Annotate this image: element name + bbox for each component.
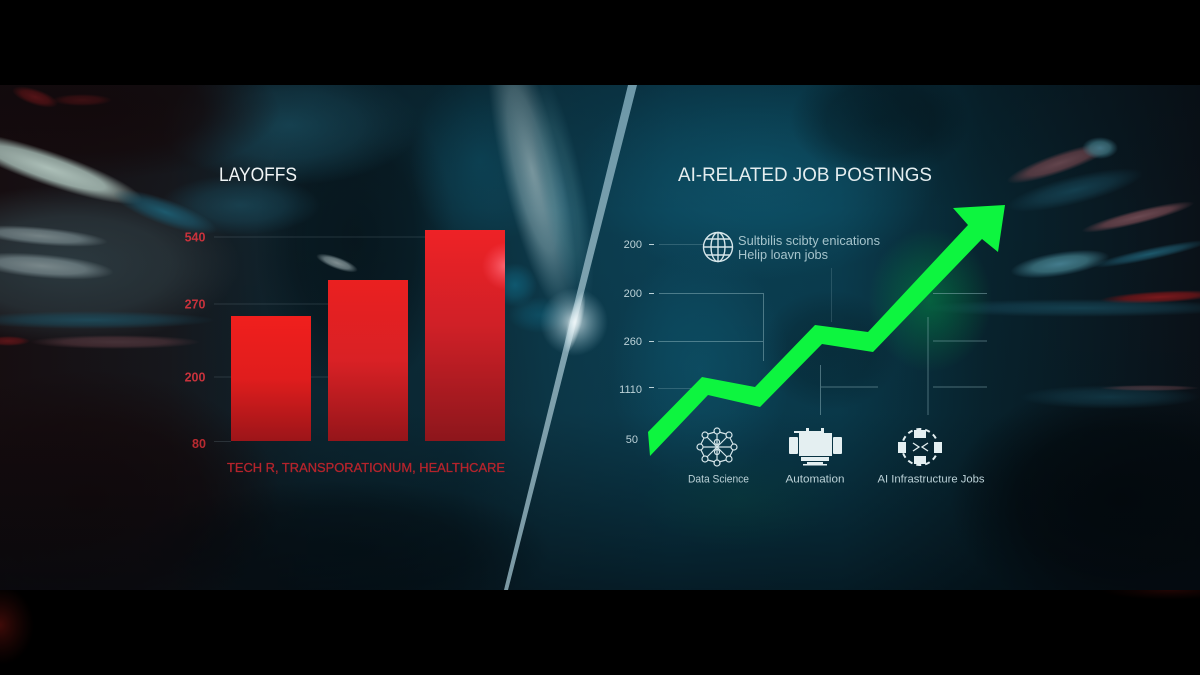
centre light beam [491,85,588,328]
icon: automation machines [789,428,842,466]
bar: healthcare [425,230,505,441]
bar: tech [231,316,311,441]
heading: layoffs: LAYOFFS [219,165,297,186]
axis ticks [649,244,654,388]
icon: AI infrastructure ring [898,429,942,465]
icon labels: Automation [786,474,844,486]
layoffs gridlines [214,237,425,442]
icon labels: AI Infrastructure Jobs [878,474,985,486]
panel: AI-related job postings chart [619,165,1005,486]
postings y axis labels: 200 [624,239,642,251]
layoffs y axis labels [185,230,206,451]
rising green arrow [648,205,1005,456]
soft background blobs [0,85,1180,587]
heading: AI-related job postings: AI-RELATED JOB POSTINGS [678,165,932,186]
postings y axis labels: 1110 [619,384,642,396]
postings y axis labels: 260 [624,336,642,348]
layoffs y axis labels: 80 [192,437,206,451]
globe caption: Sultbilis scibty enications [738,234,880,248]
left light streaks [0,82,360,349]
postings y axis labels: 200 [624,288,642,300]
right streaks [958,138,1200,408]
postings y axis labels [619,239,642,446]
icon: data science network [697,428,737,466]
icon: globe [704,232,732,262]
layoffs y axis labels: 270 [185,298,205,312]
postings y axis labels: 50 [626,434,638,446]
postings gridlines [658,244,987,415]
category label: TECH R, TRANSPORATIONUM, HEALTHCARE [227,460,505,475]
bar: transportation [328,280,408,441]
panel: layoffs bar chart [185,165,530,475]
globe caption [738,234,880,262]
divider: diagonal slash with glow [504,85,637,590]
layoffs y axis labels: 540 [185,230,205,244]
layoffs y axis labels: 200 [185,370,205,384]
icon labels [688,474,985,486]
icon labels: Data Science [688,474,749,486]
blurred motion background scene [0,85,1200,590]
globe caption: Helip loavn jobs [738,248,828,262]
